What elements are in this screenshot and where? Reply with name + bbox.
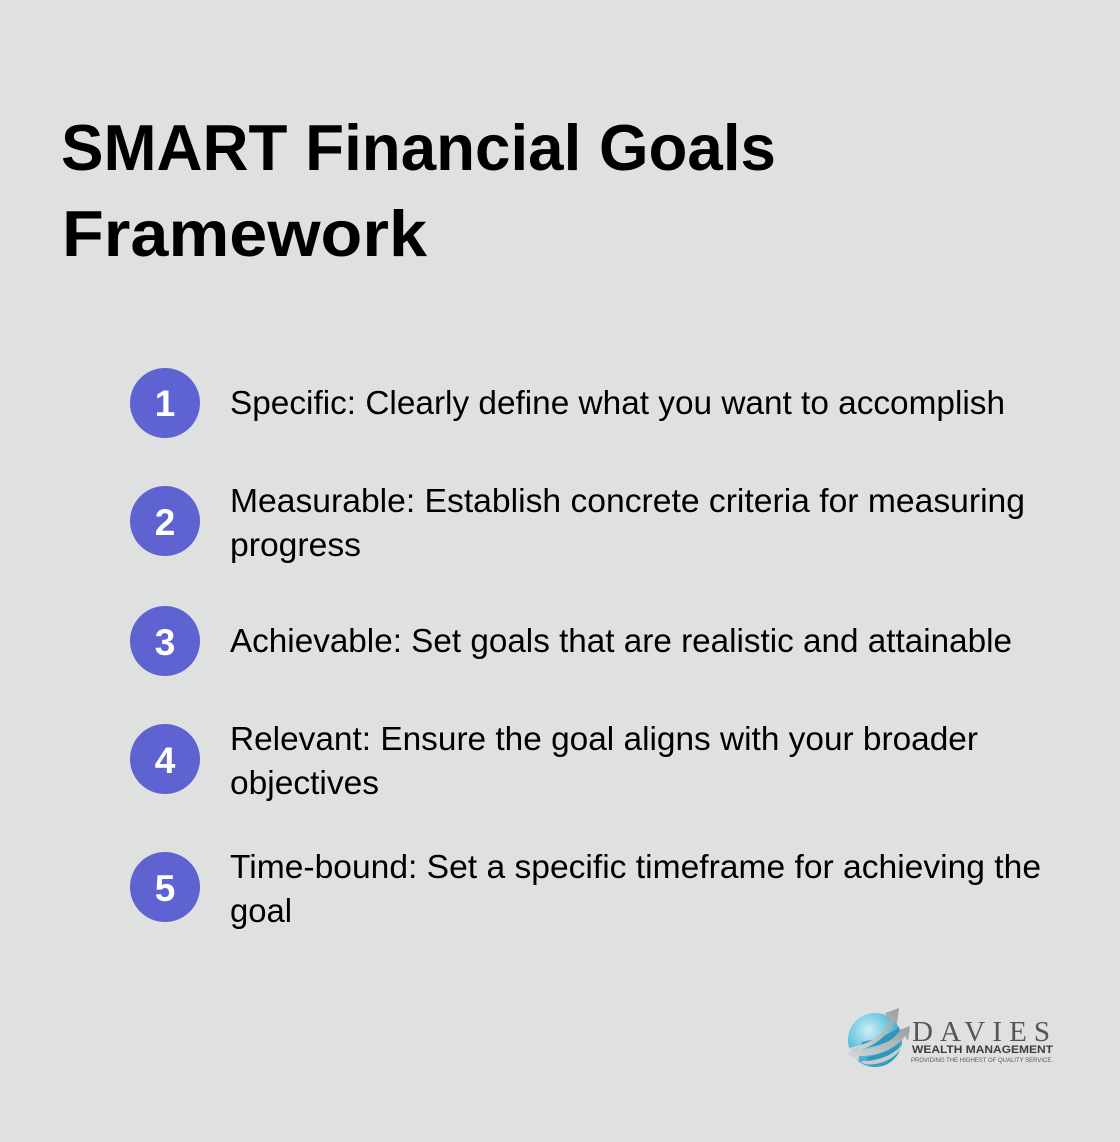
logo tagline: PROVIDING THE HIGHEST OF QUALITY SERVICE.: [911, 1057, 1053, 1064]
list item 4: Relevant: [130, 720, 978, 801]
number badge 4: [130, 724, 200, 794]
list item 5: Time-bound: [130, 848, 1041, 929]
list item 2: Measurable: [130, 482, 1025, 563]
number badge 4: 4: [155, 740, 176, 781]
text: Relevant: objectives: [230, 764, 379, 801]
text: Specific: Specific: Clearly define what you want to accomplish: [230, 384, 1005, 421]
number badge 5: 5: [155, 868, 175, 909]
text: Time-bound: goal: [230, 892, 292, 929]
title: [61, 111, 776, 270]
number badge 3: [130, 606, 200, 676]
text: Time-bound: Time-bound: Set a specific timeframe for achieving the: [230, 848, 1041, 885]
number badge 1: [130, 368, 200, 438]
list item 3: Achievable: [130, 606, 1012, 676]
text: Relevant: [230, 720, 978, 801]
text: Measurable: progress: [230, 526, 361, 563]
logo: Davies Wealth Management: [847, 1008, 1053, 1067]
logo wordmark: DAVIES: [912, 1016, 1050, 1048]
text: Achievable: Achievable: Set goals that are realistic and attainable: [230, 622, 1012, 659]
text: Measurable: [230, 482, 1025, 563]
text: Measurable: Measurable: Establish concrete criteria for measuring: [230, 482, 1025, 519]
number badge 1: 1: [155, 383, 175, 424]
text: Relevant: Relevant: Ensure the goal aligns with your broader: [230, 720, 978, 757]
list item 1: Specific: [130, 368, 1005, 438]
number badge 2: 2: [155, 502, 175, 543]
icon: globe with arrows: [847, 1008, 910, 1067]
logo subtitle: WEALTH MANAGEMENT: [912, 1044, 1053, 1056]
number badge 5: [130, 852, 200, 922]
text: Time-bound: [230, 848, 1041, 929]
number badge 2: [130, 486, 200, 556]
number badge 3: 3: [155, 622, 175, 663]
title: SMART Financial Goals: [61, 111, 776, 184]
title: Framework: [62, 197, 428, 270]
